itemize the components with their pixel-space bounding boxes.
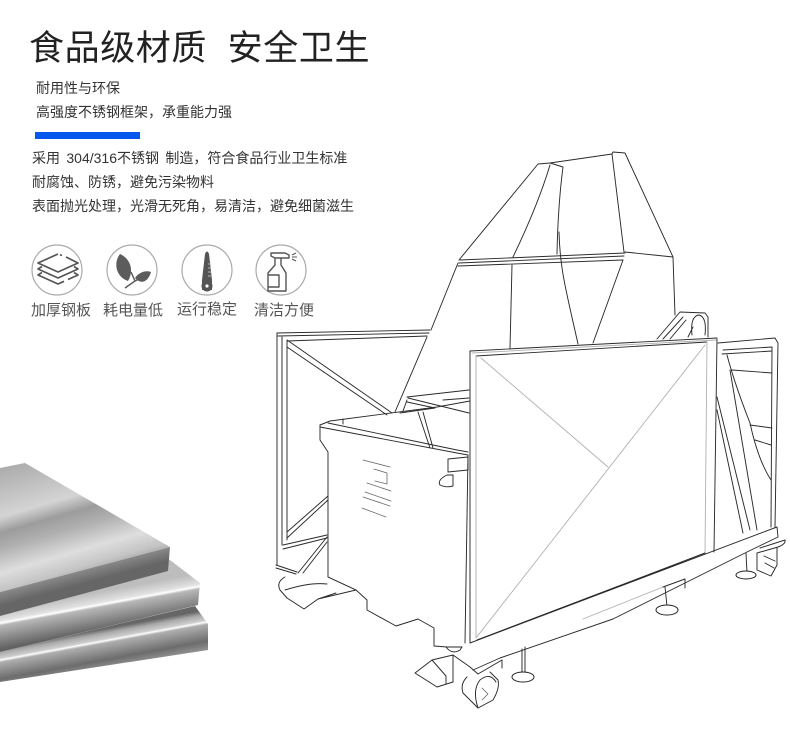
- front panel: [470, 338, 777, 643]
- waste bin: [320, 401, 470, 647]
- front caster: [415, 647, 502, 708]
- icon: leaves: [107, 245, 157, 295]
- rear left caster: [279, 577, 356, 609]
- subtitle text: 耐用性与环保 高强度不锈钢框架，承重能力强: [36, 80, 232, 120]
- hopper: [395, 152, 675, 412]
- rear right frame: [717, 338, 778, 533]
- bin handle: [439, 457, 468, 487]
- icon label: 清洁方便: 清洁方便: [254, 302, 314, 319]
- plate 3: [0, 606, 208, 682]
- plate 1 top face: [0, 463, 170, 592]
- plate 2: [0, 560, 200, 652]
- feature icons row: [31, 244, 307, 296]
- right caster: [757, 540, 785, 576]
- adjustable foot right: [736, 553, 756, 579]
- inner platform: [400, 390, 469, 448]
- icon label: 加厚钢板: 加厚钢板: [31, 302, 91, 319]
- icon: spray bottle: [256, 245, 306, 295]
- base rail: [473, 527, 778, 670]
- title: 食品级材质 安全卫生: [29, 29, 370, 68]
- icon: layered steel plates: [32, 245, 82, 295]
- icon label: 耗电量低: 耗电量低: [103, 302, 163, 319]
- adjustable foot front: [512, 647, 534, 682]
- description text: 采用 304/316不锈钢 制造，符合食品行业卫生标准 耐腐蚀、防锈，避免污染物料 表面抛光处理，光滑无死角，易清洁，避免细菌滋生: [32, 150, 354, 214]
- bin vents: [362, 460, 391, 517]
- rear left frame: [276, 330, 430, 574]
- plate 1 front edge: [0, 547, 170, 616]
- icon: thermometer: [182, 245, 232, 295]
- blue accent bar: [35, 132, 140, 139]
- hinge bracket: [657, 312, 708, 339]
- icon label: 运行稳定: 运行稳定: [177, 301, 237, 318]
- adjustable foot middle: [656, 587, 678, 615]
